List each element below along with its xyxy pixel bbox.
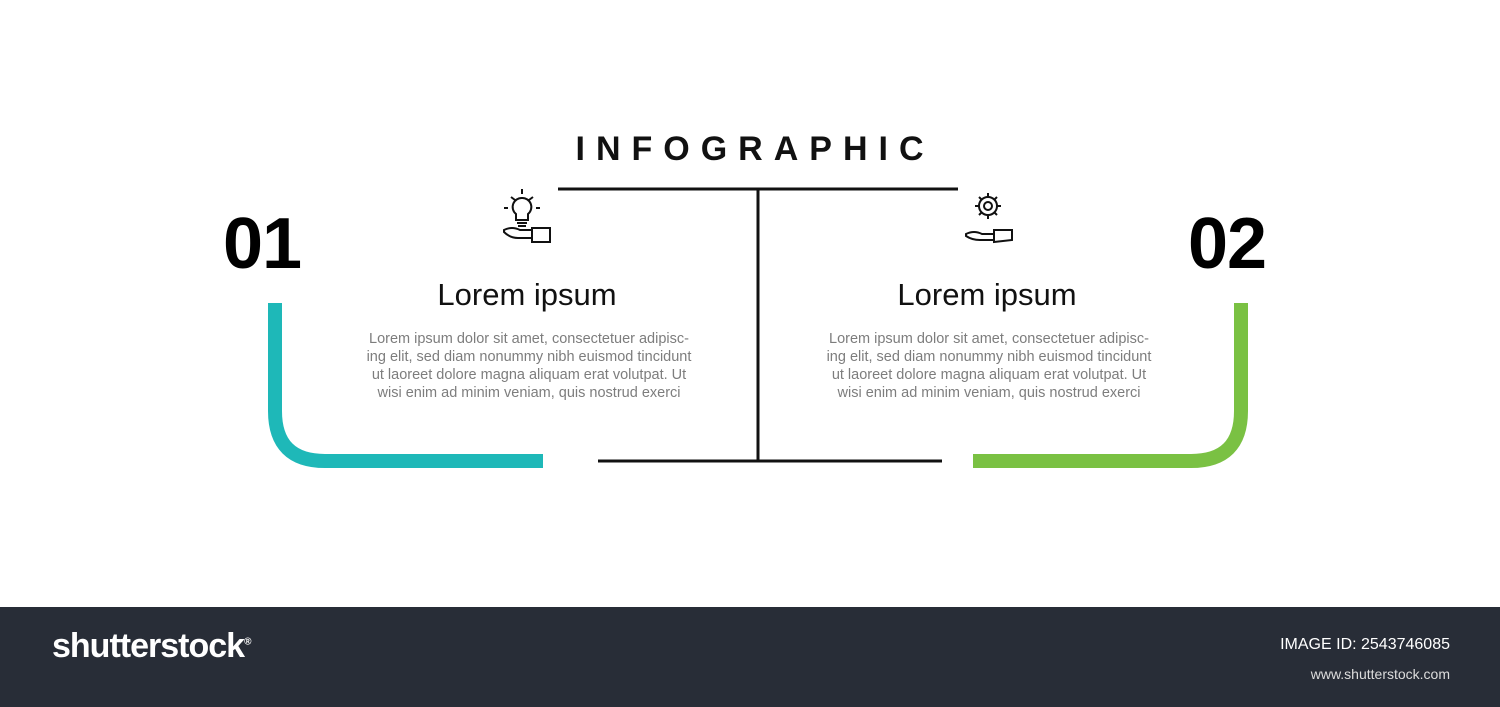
number 02: 02 <box>1188 204 1266 284</box>
icon: bulb in hand <box>503 189 551 243</box>
body text 1: wisi enim ad minim veniam, quis nostrud exerci <box>378 385 680 401</box>
image id: IMAGE ID: 2543746085 <box>1280 636 1450 653</box>
footer logo: shutterstock® <box>52 627 250 665</box>
body text 2 <box>827 331 1152 401</box>
body text 1 <box>367 331 692 401</box>
body text 2: wisi enim ad minim veniam, quis nostrud exerci <box>838 385 1140 401</box>
title: INFOGRAPHIC <box>576 130 934 168</box>
body text 2: ing elit, sed diam nonummy nibh euismod tincidunt <box>827 349 1151 365</box>
body text 1: Lorem ipsum dolor sit amet, consectetuer adipisc- <box>369 331 689 347</box>
heading 1: Lorem ipsum <box>437 277 617 312</box>
footer <box>0 607 1500 707</box>
number 01: 01 <box>223 204 301 284</box>
body text 1: ing elit, sed diam nonummy nibh euismod tincidunt <box>367 349 691 365</box>
body text 1: ut laoreet dolore magna aliquam erat volutpat. Ut <box>372 367 686 383</box>
heading 2: Lorem ipsum <box>897 277 1077 312</box>
body text 2: ut laoreet dolore magna aliquam erat volutpat. Ut <box>832 367 1146 383</box>
icon: gear in hand <box>965 193 1013 244</box>
body text 2: Lorem ipsum dolor sit amet, consectetuer adipisc- <box>829 331 1149 347</box>
url: www.shutterstock.com <box>1311 666 1450 682</box>
